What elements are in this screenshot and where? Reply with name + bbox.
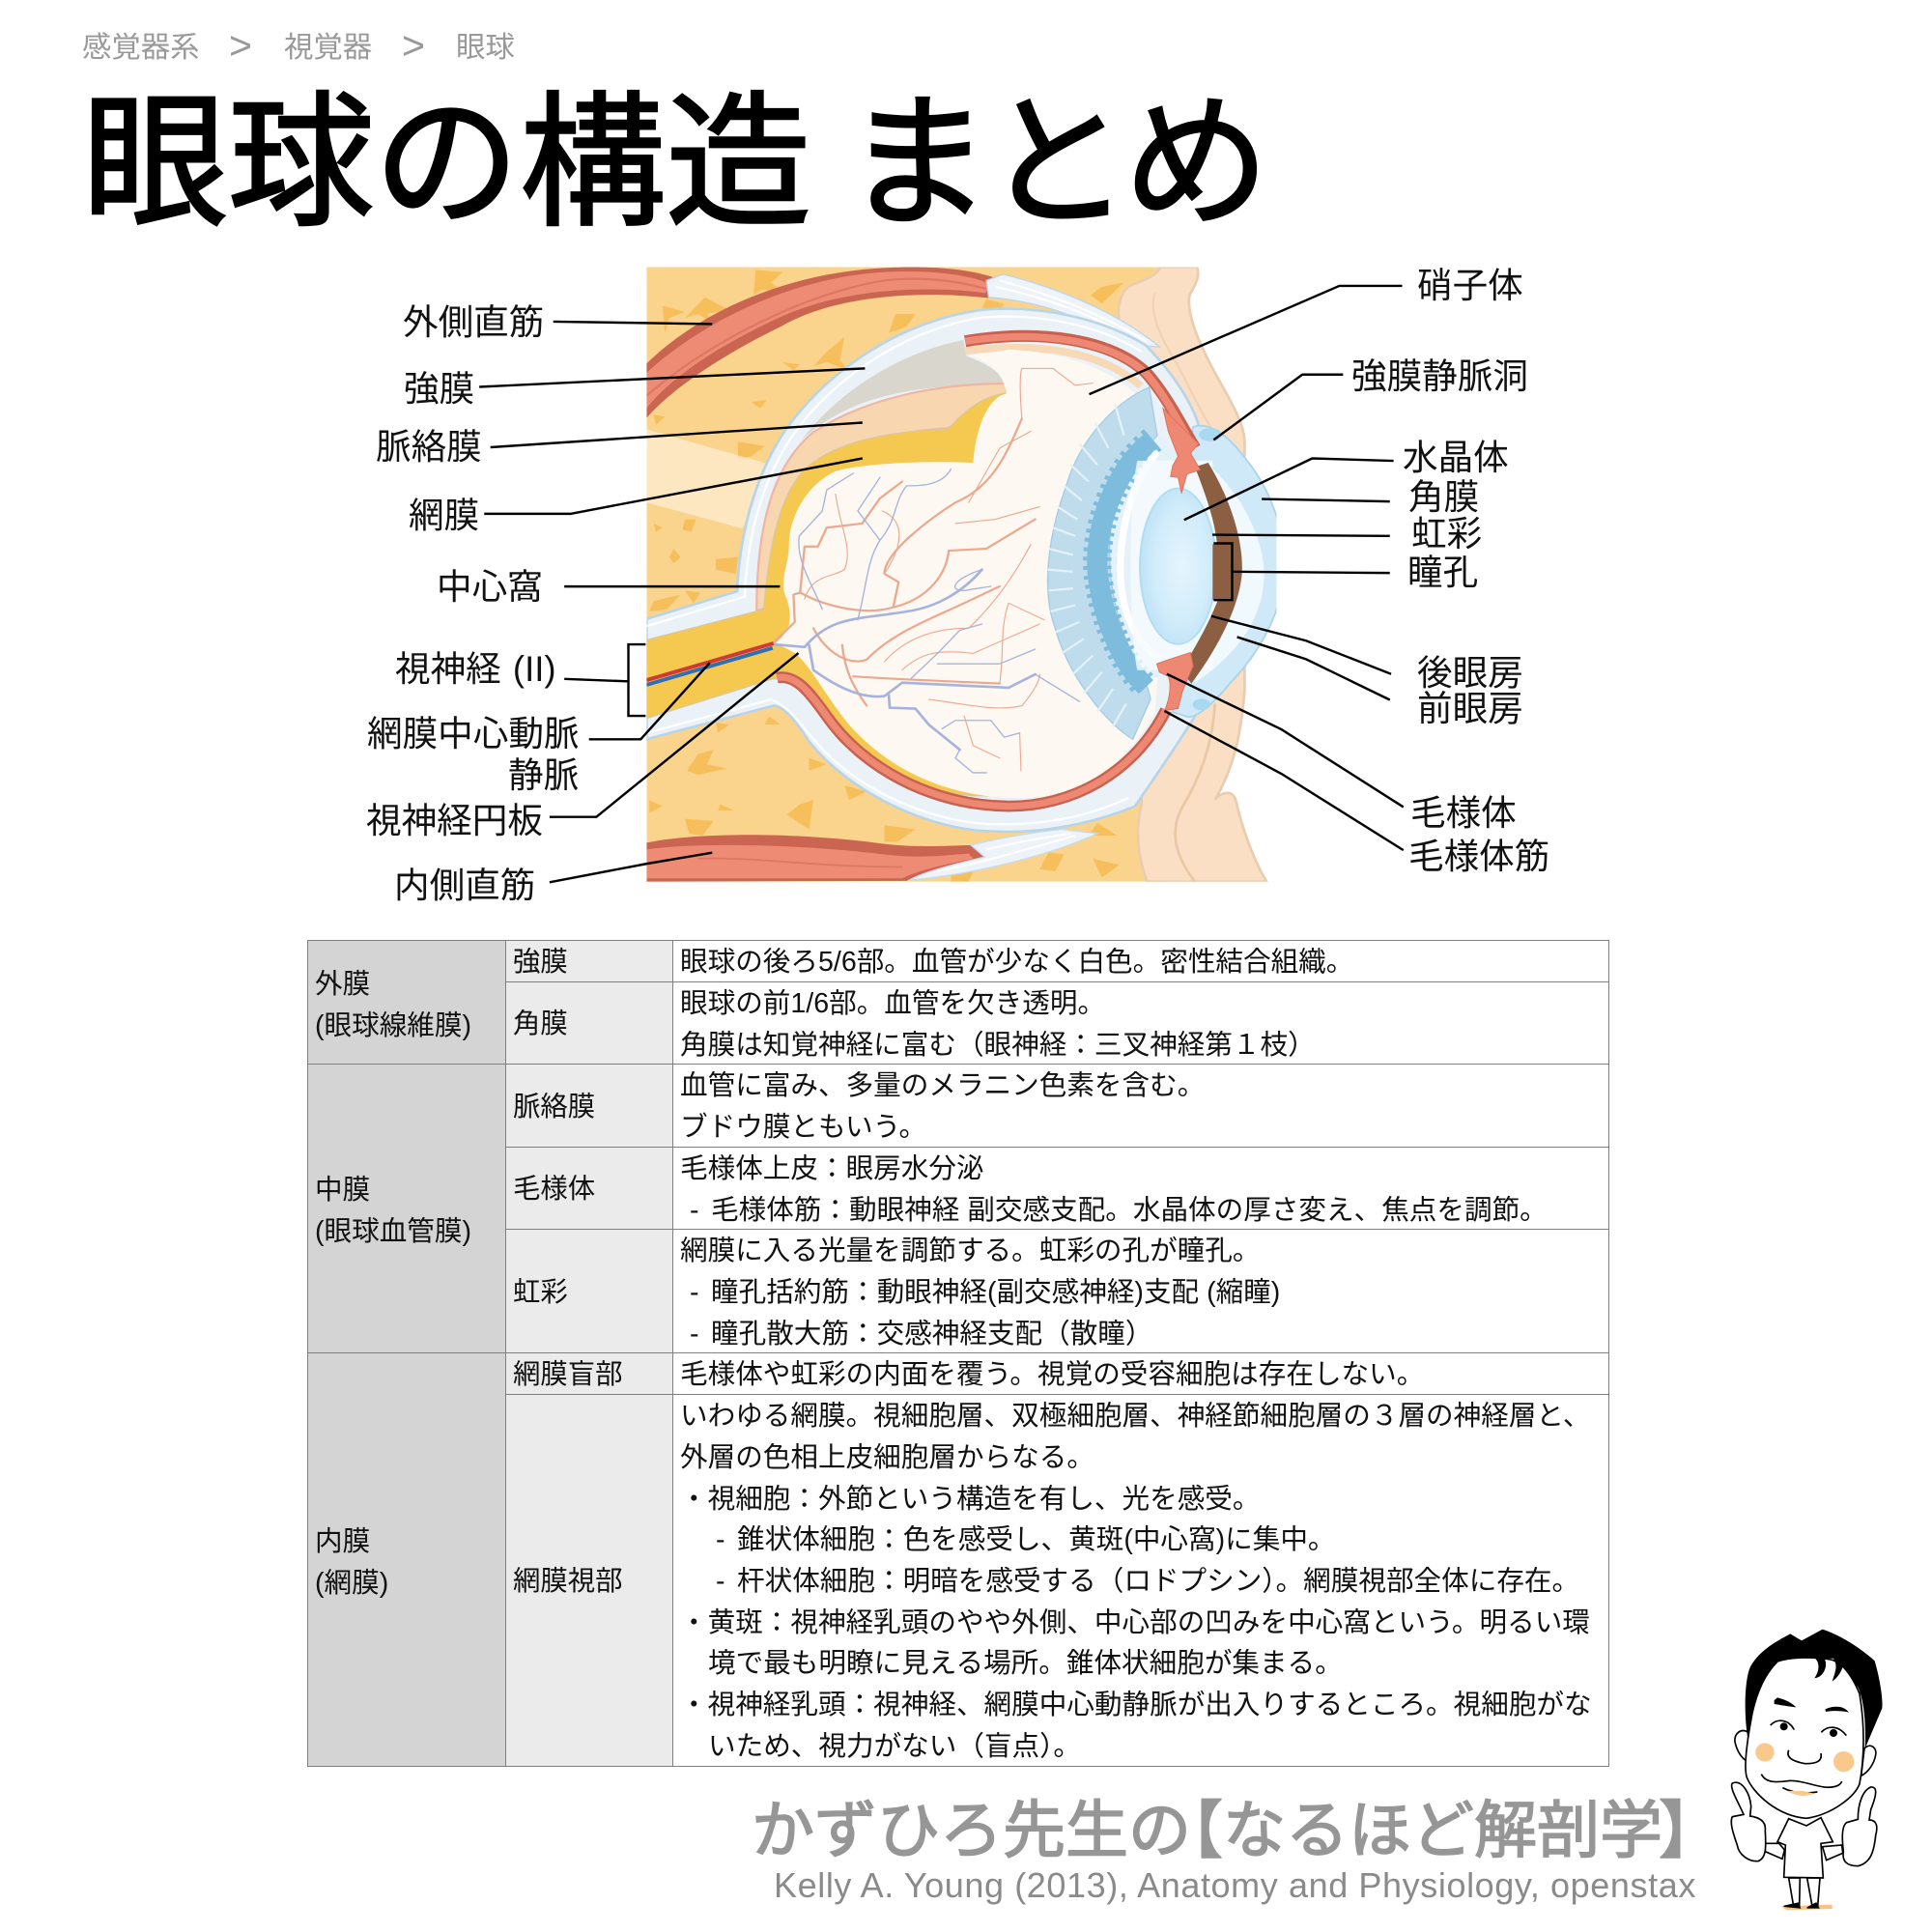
sclera xyxy=(646,309,1200,832)
choroid ring xyxy=(777,336,1195,807)
description: cornea: 眼球の前1/6部。血管を欠き透明。 xyxy=(680,988,1105,1019)
title: 眼球の構造 xyxy=(82,81,811,244)
label: vitreous: 硝子体 xyxy=(1417,266,1523,305)
lens halo xyxy=(1121,452,1160,660)
description: sclera: 眼球の後ろ5/6部。血管が少なく白色。密性結合組織。 xyxy=(680,947,1353,978)
description: optic retina: 外層の色相上皮細胞層からなる。 xyxy=(680,1442,1094,1473)
chamber behind ciliary xyxy=(1110,455,1190,678)
table xyxy=(307,940,1609,1767)
choroid cutaway xyxy=(756,384,1007,611)
group cell: inner coat: 内膜 xyxy=(315,1526,370,1557)
lower tendon xyxy=(909,830,1097,880)
label: lens: 水晶体 xyxy=(1403,438,1509,477)
face xyxy=(1746,1658,1863,1818)
breadcrumb xyxy=(82,23,515,68)
group cell: middle coat xyxy=(307,1064,506,1353)
skin of eyelid xyxy=(1119,267,1266,882)
group cell: outer coat xyxy=(307,940,506,1065)
description: optic retina: ・黄斑：視神経乳頭のやや外側、中心部の凹みを中心窩という。明るい環 xyxy=(680,1607,1590,1638)
description: choroid xyxy=(672,1064,1609,1148)
group cell: outer coat: 外膜 xyxy=(315,969,370,1000)
term: blind retina xyxy=(505,1352,673,1395)
term: optic retina: 網膜視部 xyxy=(513,1566,623,1597)
pointer lines xyxy=(479,286,1404,882)
description: iris: - xyxy=(690,1277,699,1308)
description: optic retina: ・視神経乳頭：視神経、網膜中心動静脈が出入りするところ。視細胞がな xyxy=(680,1690,1592,1720)
shirt and legs xyxy=(1765,1818,1843,1906)
eyes xyxy=(1771,1720,1846,1736)
label: pupil: 瞳孔 xyxy=(1407,553,1478,592)
label: optic nerve: 視神経 (II) xyxy=(395,649,556,689)
description: sclera xyxy=(672,940,1609,982)
title: まとめ xyxy=(845,81,1263,244)
description: ciliary body: - xyxy=(690,1195,699,1226)
mascot: thumbs up doctor xyxy=(1730,1629,1883,1911)
breadcrumb: 感覚器系 xyxy=(82,31,200,64)
cornea xyxy=(1173,426,1285,717)
group cell: middle coat: (眼球血管膜) xyxy=(315,1216,471,1247)
description: optic retina: ・視細胞：外節という構造を有し、光を感受。 xyxy=(680,1484,1260,1515)
breadcrumb: > xyxy=(402,23,425,68)
scleral venous sinus xyxy=(1193,428,1222,710)
description: blind retina: 毛様体や虹彩の内面を覆う。視覚の受容細胞は存在しない。 xyxy=(680,1359,1424,1390)
nose and mouth xyxy=(1761,1750,1842,1793)
description: ciliary body: 毛様体筋：動眼神経 副交感支配。水晶体の厚さ変え、焦点を調節。 xyxy=(711,1195,1548,1226)
term: choroid: 脈絡膜 xyxy=(513,1092,595,1122)
description: ciliary body: 毛様体上皮：眼房水分泌 xyxy=(680,1153,984,1184)
description: optic retina: いため、視力がない（盲点）。 xyxy=(708,1731,1081,1762)
description: optic retina: - xyxy=(716,1524,725,1555)
term: choroid xyxy=(505,1064,673,1148)
description: optic retina: 錐状体細胞：色を感受し、黄斑(中心窩)に集中。 xyxy=(737,1524,1336,1555)
eyebrows xyxy=(1775,1697,1849,1713)
anterior chamber xyxy=(1195,461,1264,683)
description: iris: - xyxy=(690,1319,699,1350)
description: optic retina: 杆状体細胞：明暗を感受する（ロドプシン）。網膜視部全体に存在。 xyxy=(737,1566,1579,1597)
label: anterior chamber: 前眼房 xyxy=(1417,689,1523,728)
term: ciliary body: 毛様体 xyxy=(513,1174,595,1205)
upper tendon xyxy=(986,274,1159,347)
label: choroid: 脈絡膜 xyxy=(376,427,482,467)
ciliary body xyxy=(1156,409,1200,710)
lens xyxy=(1140,488,1216,644)
retinal veins xyxy=(771,469,1080,773)
group cell: inner coat: (網膜) xyxy=(315,1567,388,1598)
term: sclera: 強膜 xyxy=(513,947,568,978)
breadcrumb: 視覚器 xyxy=(284,31,372,64)
description: optic retina: - xyxy=(716,1566,725,1597)
term: cornea xyxy=(505,981,673,1065)
iris xyxy=(1188,463,1242,684)
retina cutaway and optic nerve xyxy=(646,392,1007,796)
description: optic retina: 境で最も明瞭に見える場所。錐体状細胞が集まる。 xyxy=(708,1648,1343,1679)
term: cornea: 角膜 xyxy=(513,1009,568,1039)
label: cornea: 角膜 xyxy=(1408,477,1479,517)
term: ciliary body xyxy=(505,1147,673,1230)
ears xyxy=(1735,1731,1876,1776)
description: iris: 網膜に入る光量を調節する。虹彩の孔が瞳孔。 xyxy=(680,1236,1260,1266)
breadcrumb: > xyxy=(229,23,252,68)
light beam xyxy=(646,429,771,528)
footer brand: かずひろ先生の【なるほど解剖学】 xyxy=(752,1795,1721,1865)
description: cornea xyxy=(672,981,1609,1065)
description: choroid: 血管に富み、多量のメラニン色素を含む。 xyxy=(680,1070,1205,1101)
eye diagram xyxy=(479,267,1405,883)
label: ciliary body: 毛様体 xyxy=(1410,793,1517,833)
label: iris: 虹彩 xyxy=(1411,514,1482,554)
label: posterior chamber: 後眼房 xyxy=(1417,653,1523,693)
description: choroid: ブドウ膜ともいう。 xyxy=(680,1112,926,1143)
credit: Kelly A. Young (2013), Anatomy and Physiology, openstax xyxy=(774,1865,1696,1905)
term: blind retina: 網膜盲部 xyxy=(513,1359,623,1390)
ciliary zonule crown xyxy=(1048,387,1157,739)
medial rectus muscle xyxy=(646,835,984,882)
orbital fat xyxy=(646,267,1166,882)
description: cornea: 角膜は知覚神経に富む（眼神経：三叉神経第１枝） xyxy=(680,1030,1316,1061)
label: retina: 網膜 xyxy=(409,496,479,535)
label: vein: 静脈 xyxy=(508,755,579,795)
label: central retinal artery: 網膜中心動脈 xyxy=(367,714,579,753)
description: optic retina xyxy=(672,1394,1609,1767)
label: lateral rectus: 外側直筋 xyxy=(403,302,544,342)
label: scleral venous sinus: 強膜静脈洞 xyxy=(1351,356,1528,396)
label: fovea: 中心窩 xyxy=(437,567,543,607)
cutaway sclera inner xyxy=(801,340,1005,440)
hair xyxy=(1746,1630,1883,1748)
fringe xyxy=(1802,1644,1844,1682)
description: iris: 瞳孔括約筋：動眼神経(副交感神経)支配 (縮瞳) xyxy=(711,1277,1280,1308)
term: optic retina xyxy=(505,1394,673,1767)
description: optic retina: いわゆる網膜。視細胞層、双極細胞層、神経節細胞層の３層の神経層と、 xyxy=(680,1401,1590,1432)
description: blind retina xyxy=(672,1352,1609,1395)
lateral rectus muscle xyxy=(646,268,1000,418)
label: ciliary muscle: 毛様体筋 xyxy=(1408,837,1549,876)
breadcrumb: 眼球 xyxy=(456,31,515,64)
group cell: middle coat: 中膜 xyxy=(315,1175,370,1206)
description: iris xyxy=(672,1229,1609,1353)
group cell: inner coat xyxy=(307,1352,506,1767)
term: sclera xyxy=(505,940,673,982)
title xyxy=(82,81,1263,244)
vitreous body xyxy=(776,350,1164,798)
term: iris: 虹彩 xyxy=(513,1277,568,1308)
term: iris xyxy=(505,1229,673,1353)
thumbs up left xyxy=(1731,1782,1766,1861)
label: sclera: 強膜 xyxy=(404,369,474,409)
label: optic disc: 視神経円板 xyxy=(366,801,543,840)
ground shadow xyxy=(1780,1905,1833,1910)
description: iris: 瞳孔散大筋：交感神経支配（散瞳） xyxy=(711,1319,1153,1350)
cheeks xyxy=(1755,1743,1854,1772)
description: ciliary body xyxy=(672,1147,1609,1230)
label: medial rectus: 内側直筋 xyxy=(394,866,535,905)
thumbs up right xyxy=(1842,1787,1877,1866)
group cell: outer coat: (眼球線維膜) xyxy=(315,1010,471,1041)
retinal arteries xyxy=(774,368,1093,771)
central retinal artery and vein xyxy=(646,643,774,685)
